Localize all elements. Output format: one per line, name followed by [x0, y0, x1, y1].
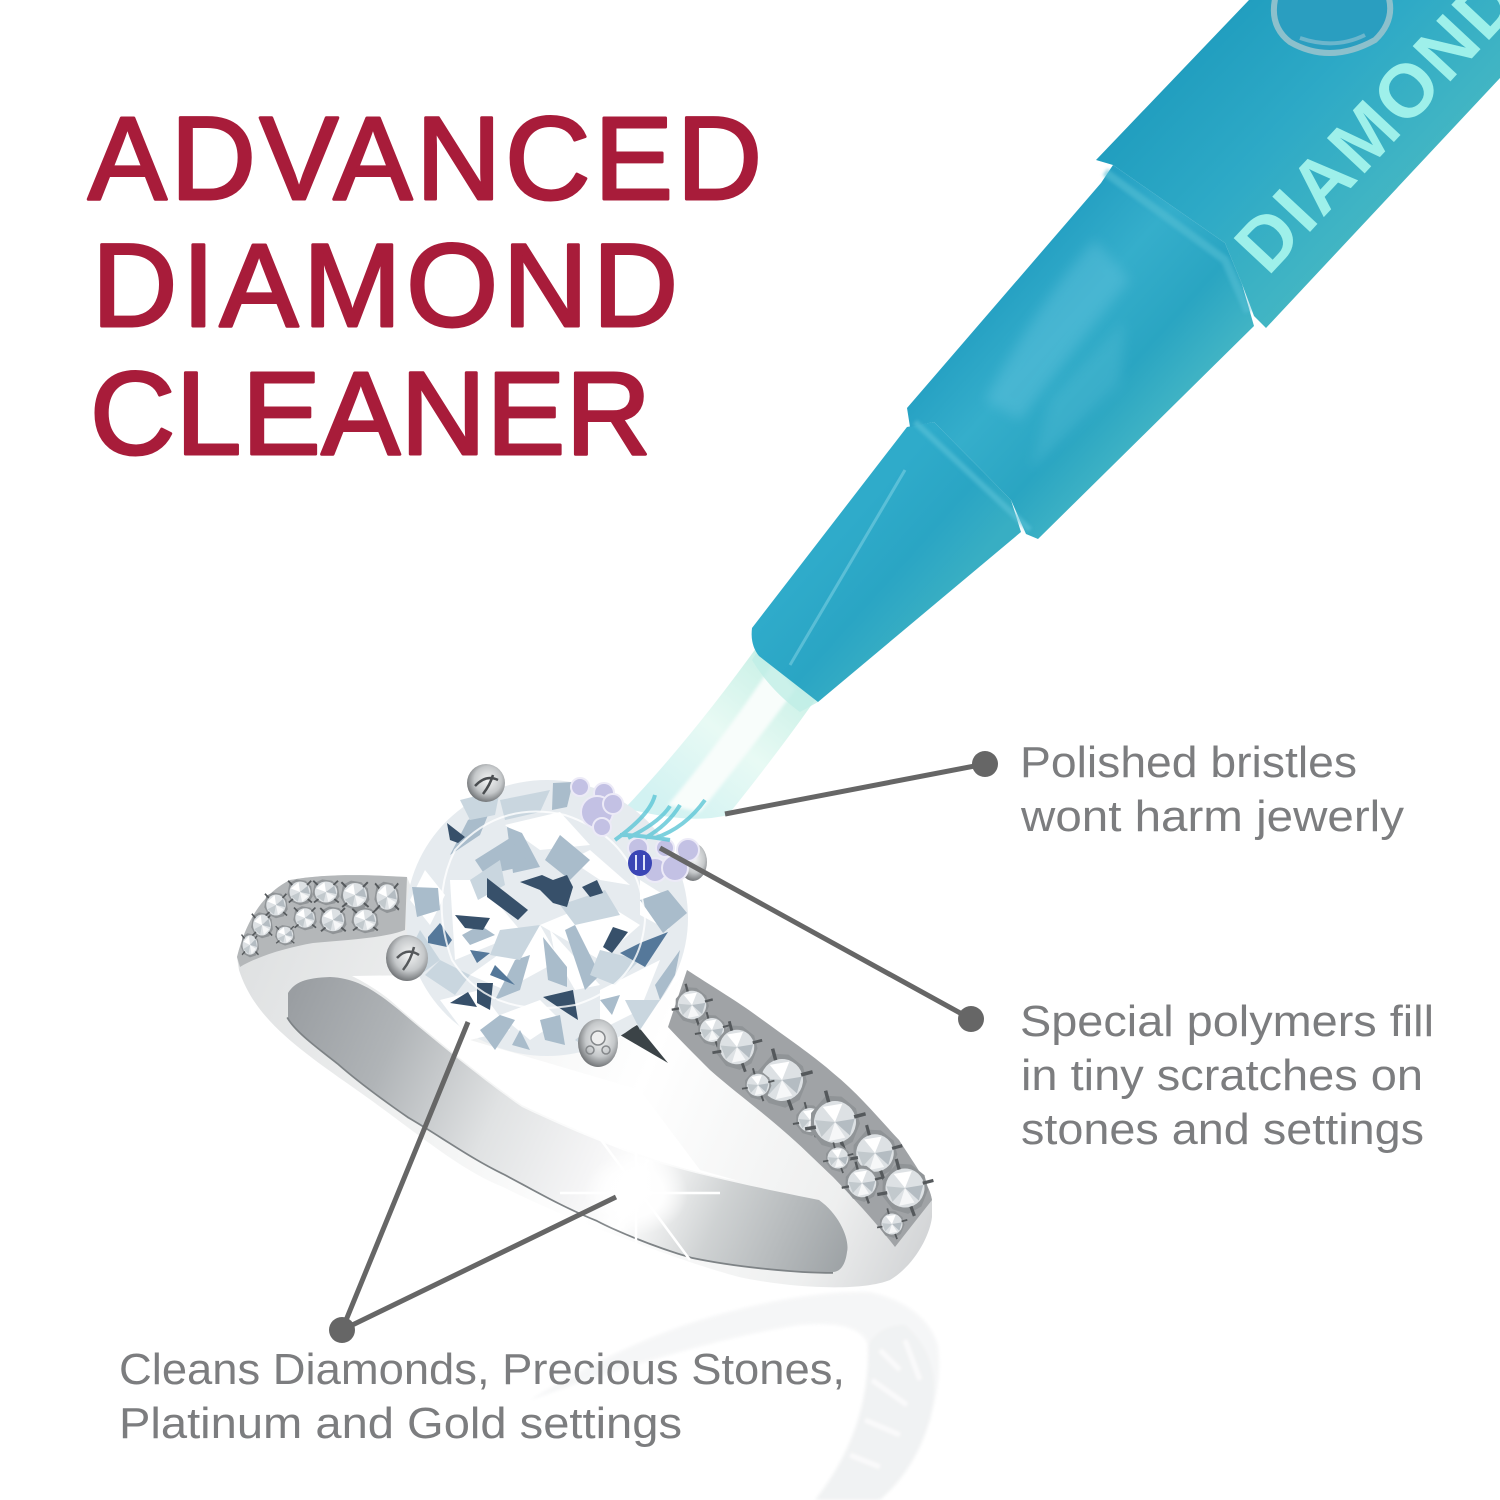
title: CLEANER [90, 348, 651, 480]
inner band surface [288, 977, 848, 1272]
title: ADVANCED [88, 93, 762, 225]
top prong [467, 764, 505, 802]
prong shadow [620, 1025, 668, 1063]
left prong [386, 935, 428, 981]
sparkle [560, 1125, 720, 1260]
callout: stones and settings: Platinum and Gold settings [119, 1399, 682, 1448]
nozzle [752, 422, 1021, 702]
title: DIAMOND [92, 220, 678, 352]
callout: polymers [660, 848, 1434, 1154]
callout: stones and settings: Cleans Diamonds, Precious Stones, [119, 1345, 845, 1394]
white inside of ring [352, 975, 739, 1181]
top section band [1105, 172, 1248, 312]
right pave stones [668, 970, 937, 1247]
callout: polymers: in tiny scratches on [1021, 1051, 1423, 1100]
ring [237, 764, 937, 1287]
callout: polymers: Special polymers fill [1020, 997, 1434, 1046]
reflection of ring [530, 1292, 939, 1500]
heart logo [1274, 0, 1390, 53]
nozzle highlights [790, 470, 905, 665]
teal bristle tips [615, 795, 705, 840]
left pave stones [237, 875, 407, 967]
pen middle section [907, 165, 1254, 539]
diamond [406, 780, 688, 1056]
callout: bristles: wont harm jewerly [1020, 792, 1404, 841]
cleaning polymers [571, 778, 705, 882]
callout: stones and settings [119, 1022, 845, 1448]
right prong [679, 843, 707, 881]
prongs [386, 764, 707, 1067]
title [88, 93, 762, 480]
callout: bristles: Polished bristles [1020, 738, 1357, 787]
bottom prong [578, 1019, 618, 1067]
callout: polymers: stones and settings [1021, 1105, 1424, 1154]
band lower rim shadow [288, 1017, 833, 1272]
middle section highlights [985, 240, 1130, 420]
callout: bristles [725, 738, 1404, 841]
bristles [625, 640, 818, 819]
ring band outer [237, 875, 932, 1287]
pen top section [1096, 0, 1500, 328]
pen applicator [625, 0, 1500, 819]
